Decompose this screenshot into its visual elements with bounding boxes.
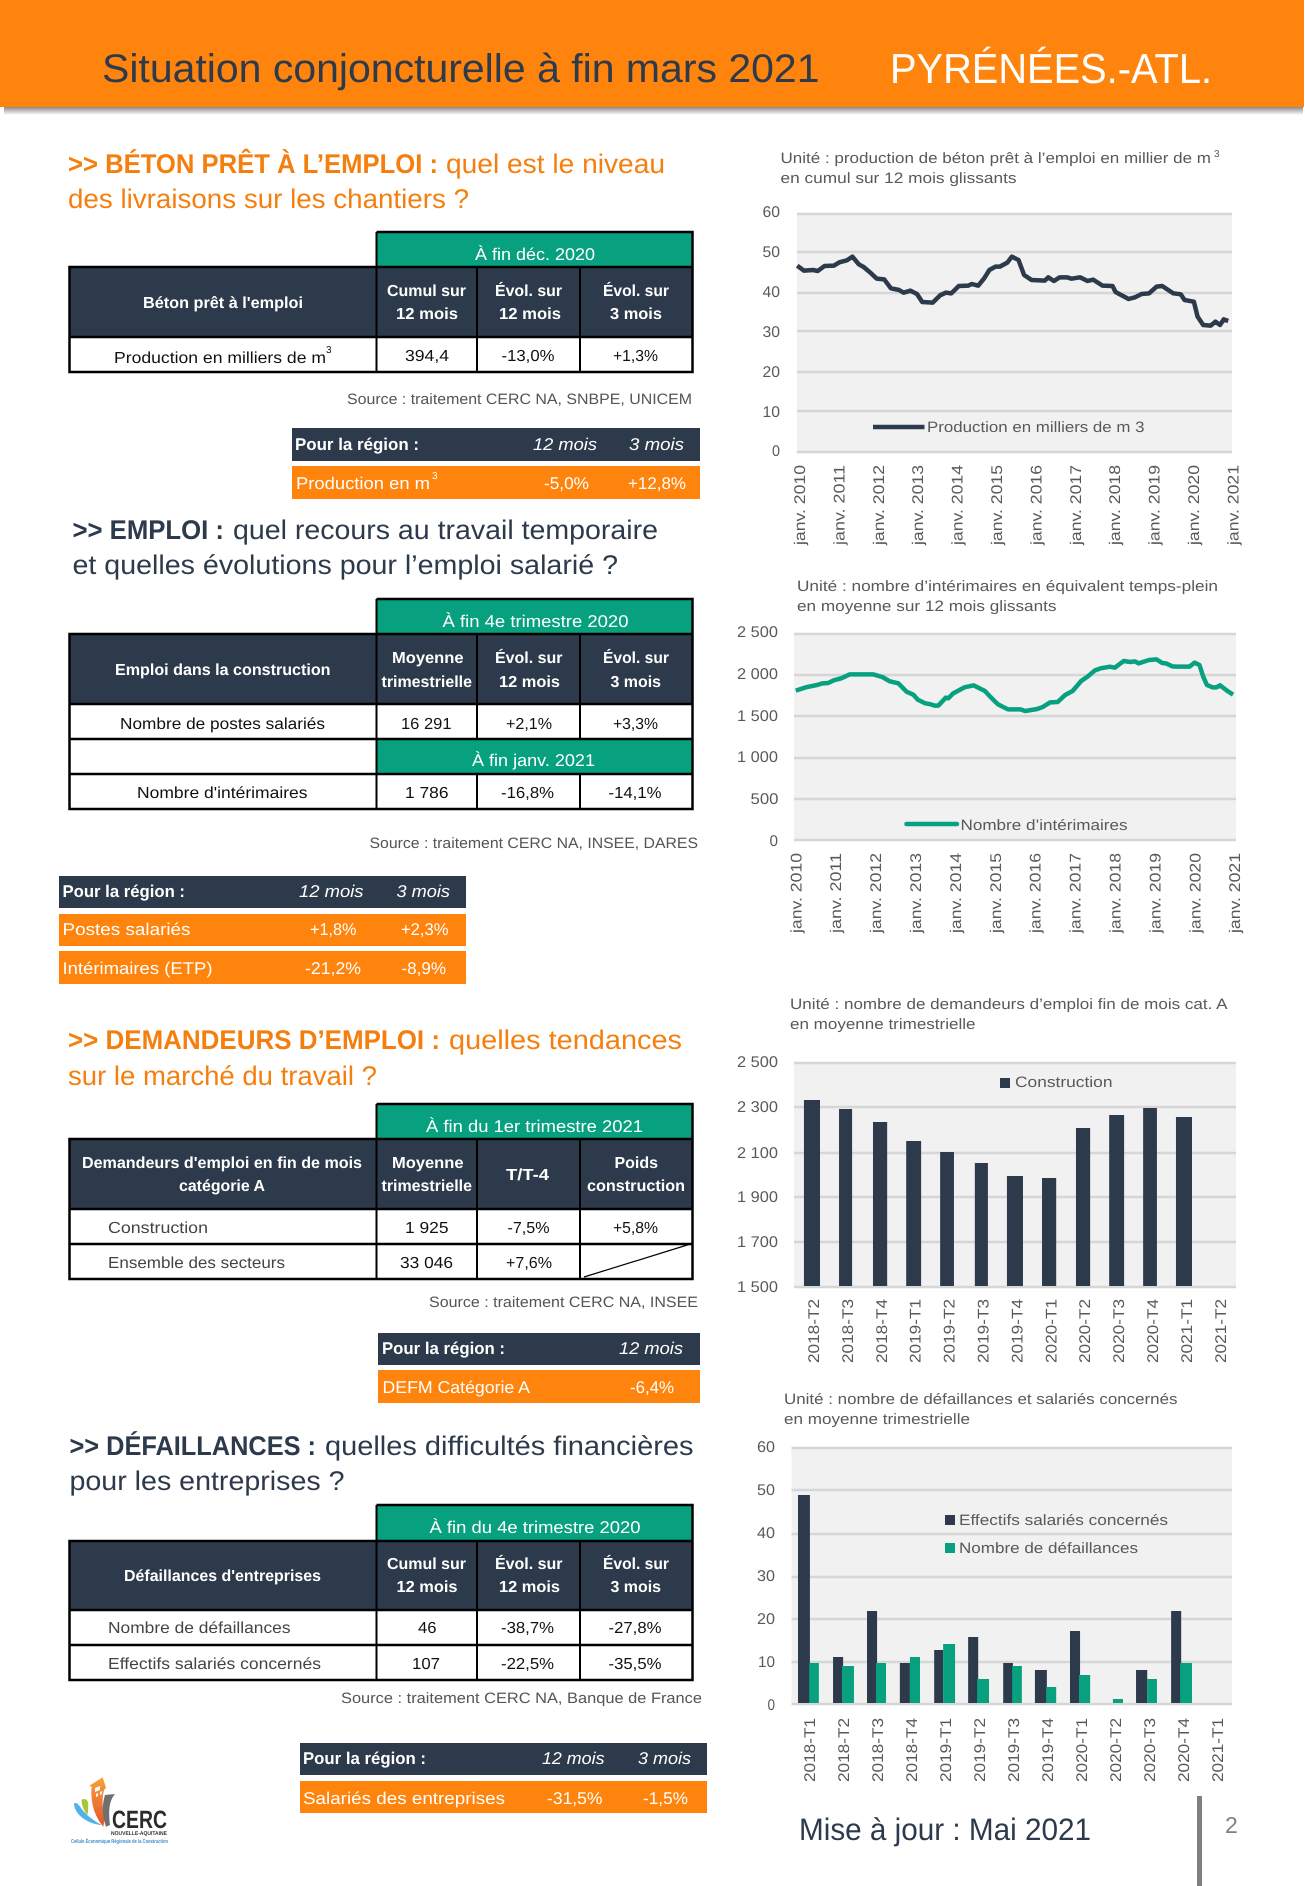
heading: défaillances [70, 1431, 694, 1496]
table: défaillances: 107 [412, 1656, 440, 1673]
y axis: béton: 0 [772, 443, 780, 460]
y axis: béton: 50 [762, 244, 780, 261]
x axis: béton: janv. 2010 [792, 465, 809, 546]
line series: intérimaires [796, 659, 1233, 711]
chart caption: béton: en cumul sur 12 mois glissants [780, 170, 1016, 187]
table: emploi: 16 291 [401, 716, 452, 733]
table: demandeurs d'emploi: T/T-4 [506, 1167, 549, 1184]
table: demandeurs d'emploi: +7,6% [506, 1255, 552, 1272]
chart caption: défaillances: en moyenne trimestrielle [784, 1411, 970, 1428]
chart caption: défaillances: Unité : nombre de défaillances et salariés concernés [784, 1391, 1178, 1408]
table: demandeurs d'emploi: À fin du 1er trimestre 2021 [426, 1117, 643, 1136]
heading: demandeurs d'emploi: sur le marché du travail ? [68, 1061, 377, 1091]
table: emploi: Évol. sur [603, 648, 669, 667]
y axis: demandeurs d'emploi: 1 500 [737, 1279, 778, 1296]
heading: emploi: et quelles évolutions pour l’emploi salarié ? [72, 550, 618, 580]
table: défaillances: 46 [418, 1620, 437, 1637]
table: emploi: Emploi dans la construction [115, 662, 330, 679]
region box: défaillances: Salariés des entreprises [303, 1789, 505, 1808]
table: béton: +1,3% [613, 348, 658, 365]
table: béton: 3 [326, 345, 332, 356]
x axis: défaillances: 2019-T1 [938, 1718, 955, 1782]
table: défaillances: -22,5% [501, 1656, 554, 1673]
x axis: intérimaires: janv. 2014 [948, 853, 965, 934]
y axis: défaillances: 50 [757, 1482, 775, 1499]
y axis: intérimaires: 500 [750, 791, 779, 808]
x axis: demandeurs d'emploi: 2019-T2 [942, 1299, 959, 1363]
table: défaillances: 12 mois [499, 1579, 560, 1596]
table: emploi: +3,3% [613, 716, 658, 733]
y axis: défaillances: 0 [768, 1697, 775, 1714]
x axis: demandeurs d'emploi: 2018-T4 [874, 1299, 891, 1363]
chart caption: intérimaires: Unité : nombre d’intérimaires en équivalent temps-plein [797, 578, 1218, 595]
x axis: défaillances: 2020-T4 [1176, 1718, 1193, 1782]
bar series: construction [804, 1100, 1192, 1286]
table: emploi: 12 mois [499, 674, 560, 691]
x axis: intérimaires: janv. 2018 [1108, 853, 1124, 934]
x axis: demandeurs d'emploi: 2018-T2 [806, 1299, 823, 1363]
table: emploi: 1 786 [405, 785, 449, 802]
region box: béton: 12 mois [533, 435, 598, 454]
x axis: demandeurs d'emploi: 2020-T1 [1043, 1299, 1060, 1363]
x axis: demandeurs d'emploi: 2020-T2 [1077, 1299, 1094, 1363]
line series: production béton [797, 257, 1228, 326]
legend: intérimaires: Nombre d’intérimaires [960, 817, 1128, 834]
heading: demandeurs d'emploi: quelles tendances [449, 1025, 682, 1055]
x axis: demandeurs d'emploi: 2018-T3 [840, 1299, 857, 1363]
table: demandeurs d'emploi: catégorie A [179, 1178, 265, 1195]
table: défaillances: Évol. sur [603, 1554, 669, 1573]
chart caption: demandeurs d'emploi: en moyenne trimestrielle [790, 1016, 976, 1033]
x axis: défaillances: 2019-T4 [1040, 1718, 1057, 1782]
region box: demandeurs d'emploi [378, 1333, 700, 1403]
bar series: effectifs salariés concernés [798, 1495, 1181, 1703]
region box: demandeurs d'emploi: 12 mois [619, 1339, 684, 1358]
region box: emploi: Intérimaires (ETP) [62, 959, 212, 978]
table: demandeurs d'emploi: 1 925 [405, 1220, 449, 1237]
region box: béton: +12,8% [628, 474, 686, 493]
legend: défaillances [945, 1512, 1168, 1557]
table: emploi: À fin janv. 2021 [472, 751, 595, 770]
table: défaillances: -27,8% [608, 1620, 662, 1637]
table: béton: Production en milliers de m [114, 350, 326, 367]
table: défaillances: 3 mois [610, 1579, 661, 1596]
x axis: béton: janv. 2015 [989, 465, 1006, 546]
x axis: intérimaires: janv. 2012 [868, 853, 885, 934]
x axis: béton [792, 465, 1242, 546]
heading: béton: >> BÉTON PRÊT À L’EMPLOI : [68, 148, 438, 179]
x axis: demandeurs d'emploi: 2020-T3 [1111, 1299, 1128, 1363]
y axis: béton: 30 [762, 324, 780, 341]
chart caption: demandeurs d'emploi: Unité : nombre de demandeurs d’emploi fin de mois cat. A [790, 996, 1228, 1013]
bar series: nombre de défaillances [809, 1644, 1192, 1703]
region box: défaillances: 3 mois [638, 1749, 692, 1768]
table: demandeurs d'emploi [70, 1104, 692, 1279]
region box: défaillances: -31,5% [547, 1789, 602, 1808]
logo: CERC Nouvelle-Aquitaine: CERC [112, 1806, 167, 1834]
x axis: demandeurs d'emploi: 2019-T1 [908, 1299, 925, 1363]
header banner [0, 0, 1304, 115]
legend: construction: Construction [1015, 1074, 1112, 1091]
table: emploi: Nombre d'intérimaires [137, 785, 308, 802]
region box: béton: 3 [432, 471, 438, 482]
region box: emploi: +2,3% [401, 920, 448, 939]
region box: emploi: Pour la région : [62, 882, 185, 901]
table: demandeurs d'emploi: Construction [108, 1220, 208, 1237]
table: emploi: Évol. sur [495, 648, 562, 667]
x axis: demandeurs d'emploi: 2019-T3 [976, 1299, 992, 1363]
x axis: défaillances: 2020-T1 [1074, 1718, 1091, 1782]
footer: mise à jour: Mise à jour : Mai 2021 [799, 1812, 1091, 1847]
table: défaillances: Cumul sur [387, 1556, 466, 1573]
chart caption: béton: 3 [1214, 149, 1220, 160]
logo: CERC Nouvelle-Aquitaine [71, 1777, 168, 1845]
footer: page number: 2 [1225, 1812, 1238, 1838]
table: défaillances: À fin du 4e trimestre 2020 [430, 1518, 640, 1537]
y axis: défaillances: 40 [757, 1525, 775, 1542]
x axis: intérimaires: janv. 2013 [908, 853, 925, 934]
chart: production de béton [762, 149, 1242, 546]
x axis: défaillances: 2019-T2 [972, 1718, 989, 1782]
y axis: intérimaires [737, 624, 779, 850]
region box: emploi: +1,8% [310, 920, 356, 939]
x axis: béton: janv. 2018 [1107, 465, 1124, 546]
y axis: intérimaires: 2 000 [737, 666, 778, 683]
table: défaillances: 12 mois [396, 1579, 458, 1596]
y axis: béton: 20 [762, 364, 780, 381]
x axis: intérimaires: janv. 2011 [828, 853, 845, 934]
table: demandeurs d'emploi: Ensemble des secteurs [108, 1255, 285, 1272]
chart caption: béton [780, 149, 1220, 187]
heading: demandeurs d'emploi: >> DEMANDEURS D’EMPLOI : [68, 1025, 440, 1055]
x axis: intérimaires: janv. 2015 [988, 853, 1005, 934]
x axis: défaillances: 2018-T4 [904, 1718, 921, 1782]
footer: vertical divider [1197, 1796, 1202, 1886]
table: béton: À fin déc. 2020 [475, 245, 595, 264]
legend: défaillances: Nombre de défaillances [959, 1540, 1138, 1557]
table: défaillances: Nombre de défaillances [108, 1620, 290, 1637]
table: emploi: Moyenne [392, 650, 464, 667]
y axis: demandeurs d'emploi: 2 300 [737, 1099, 778, 1116]
chart: défaillances [757, 1391, 1232, 1782]
table: défaillances [70, 1505, 692, 1680]
y axis: intérimaires: 1 000 [737, 749, 778, 766]
x axis: béton: janv. 2012 [871, 465, 888, 546]
heading: défaillances: pour les entreprises ? [70, 1466, 344, 1496]
y axis: défaillances: 20 [757, 1611, 775, 1628]
source: béton: Source : traitement CERC NA, SNBPE, UNICEM [347, 391, 692, 408]
y axis: demandeurs d'emploi: 2 100 [737, 1145, 778, 1162]
region box: béton [292, 428, 700, 499]
region box: béton: Pour la région : [295, 435, 419, 454]
legend: défaillances: Effectifs salariés concernés [959, 1512, 1168, 1529]
chart: demandeurs d'emploi [737, 996, 1236, 1363]
y axis: béton [762, 204, 780, 460]
x axis: intérimaires: janv. 2020 [1187, 853, 1204, 934]
heading: emploi: quel recours au travail temporaire [233, 515, 658, 545]
region box: demandeurs d'emploi: DEFM Catégorie A [382, 1378, 531, 1397]
table: emploi: 3 mois [610, 674, 661, 691]
x axis: défaillances [802, 1718, 1227, 1782]
y axis: défaillances: 10 [758, 1654, 775, 1671]
x axis: béton: janv. 2020 [1186, 465, 1203, 546]
panel: béton prêt à l'emploi [68, 148, 700, 499]
y axis: béton: 40 [762, 284, 780, 301]
x axis: béton: janv. 2011 [831, 465, 848, 546]
y axis: demandeurs d'emploi [737, 1054, 778, 1296]
y axis: intérimaires: 1 500 [737, 708, 778, 725]
y axis: demandeurs d'emploi: 2 500 [737, 1054, 778, 1071]
logo: CERC Nouvelle-Aquitaine: NOUVELLE-AQUITAINE [111, 1831, 167, 1837]
table: défaillances: -35,5% [608, 1656, 662, 1673]
x axis: demandeurs d'emploi: 2019-T4 [1009, 1299, 1026, 1363]
region box: béton: 3 mois [629, 435, 685, 454]
x axis: intérimaires: janv. 2021 [1227, 853, 1244, 934]
table: emploi [70, 599, 692, 809]
x axis: demandeurs d'emploi: 2021-T1 [1179, 1299, 1196, 1363]
chart caption: défaillances [784, 1391, 1178, 1428]
table: demandeurs d'emploi: construction [587, 1178, 685, 1195]
chart: intérimaires [737, 578, 1244, 934]
y axis: défaillances: 30 [757, 1568, 775, 1585]
region box: béton: Production en m [296, 474, 430, 493]
panel: emploi [59, 515, 698, 984]
region box: emploi: -8,9% [402, 959, 446, 978]
x axis: intérimaires: janv. 2017 [1068, 853, 1085, 934]
x axis: demandeurs d'emploi: 2021-T2 [1213, 1299, 1230, 1363]
region box: demandeurs d'emploi: Pour la région : [382, 1339, 505, 1358]
region box: défaillances: 12 mois [542, 1749, 605, 1768]
heading: emploi [72, 515, 658, 580]
source: défaillances: Source : traitement CERC NA, Banque de France [341, 1690, 702, 1707]
table: demandeurs d'emploi: Demandeurs d'emploi en fin de mois [82, 1155, 362, 1172]
y axis: béton: 10 [762, 404, 780, 421]
table: emploi: +2,1% [506, 716, 552, 733]
table: béton: Cumul sur [387, 283, 466, 300]
region box: demandeurs d'emploi: -6,4% [630, 1378, 674, 1397]
x axis: intérimaires: janv. 2016 [1028, 853, 1045, 934]
region box: béton: -5,0% [544, 474, 589, 493]
x axis: béton: janv. 2017 [1068, 465, 1085, 546]
title: Situation conjoncturelle à fin mars 2021 [102, 47, 820, 91]
table: emploi: Nombre de postes salariés [120, 716, 325, 733]
heading: béton: des livraisons sur les chantiers ? [68, 184, 469, 214]
x axis: intérimaires: janv. 2010 [788, 853, 805, 934]
x axis: défaillances: 2018-T3 [870, 1718, 887, 1782]
region box: défaillances [300, 1743, 707, 1813]
table: béton: Évol. sur [495, 281, 562, 300]
chart caption: demandeurs d'emploi [790, 996, 1228, 1033]
x axis: béton: janv. 2016 [1028, 465, 1045, 546]
table: béton: 12 mois [499, 306, 561, 323]
table: demandeurs d'emploi: Poids [614, 1155, 658, 1172]
x axis: défaillances: 2021-T1 [1210, 1718, 1227, 1782]
x axis: défaillances: 2018-T1 [802, 1718, 819, 1782]
panel: demandeurs d'emploi [68, 1025, 700, 1403]
heading: défaillances: >> DÉFAILLANCES : [70, 1431, 316, 1461]
region box: emploi: 12 mois [299, 882, 364, 901]
x axis: défaillances: 2018-T2 [836, 1718, 853, 1782]
table: béton: 3 mois [610, 306, 662, 323]
chart caption: intérimaires: en moyenne sur 12 mois glissants [797, 598, 1056, 615]
y axis: intérimaires: 2 500 [737, 624, 778, 641]
legend: production béton: Production en milliers de m 3 [927, 419, 1144, 436]
x axis: béton: janv. 2014 [950, 465, 967, 546]
y axis: demandeurs d'emploi: 1 900 [737, 1189, 778, 1206]
source: demandeurs d'emploi: Source : traitement CERC NA, INSEE [429, 1294, 698, 1311]
x axis: demandeurs d'emploi: 2020-T4 [1145, 1299, 1162, 1363]
x axis: béton: janv. 2013 [910, 465, 927, 546]
table: défaillances: Évol. sur [495, 1554, 562, 1573]
table: demandeurs d'emploi: 33 046 [400, 1255, 453, 1272]
region box: emploi: Postes salariés [62, 920, 190, 939]
chart caption: béton: Unité : production de béton prêt à l’emploi en millier de m [780, 150, 1211, 167]
table: défaillances: -38,7% [501, 1620, 554, 1637]
y axis: béton: 60 [762, 204, 780, 221]
table: demandeurs d'emploi: -7,5% [508, 1220, 550, 1237]
table: demandeurs d'emploi: trimestrielle [382, 1178, 472, 1195]
x axis: béton: janv. 2021 [1225, 465, 1242, 546]
chart caption: intérimaires [797, 578, 1218, 615]
department name: PYRÉNÉES.-ATL. [890, 45, 1212, 92]
y axis: défaillances [757, 1439, 775, 1714]
table: défaillances: Effectifs salariés concernés [108, 1656, 321, 1673]
source: emploi: Source : traitement CERC NA, INSEE, DARES [370, 835, 698, 852]
table: emploi: -16,8% [501, 785, 554, 802]
table: béton: Béton prêt à l'emploi [143, 295, 303, 312]
x axis: béton: janv. 2019 [1147, 465, 1164, 546]
table: demandeurs d'emploi: +5,8% [613, 1220, 658, 1237]
table: béton: Évol. sur [603, 281, 669, 300]
logo: CERC Nouvelle-Aquitaine: Cellule Économique Régionale de la Construction [71, 1838, 168, 1845]
table: défaillances: Défaillances d'entreprises [124, 1568, 321, 1585]
y axis: demandeurs d'emploi: 1 700 [737, 1234, 778, 1251]
table: béton: 394,4 [405, 348, 449, 365]
panel: défaillances [70, 1431, 707, 1813]
x axis: intérimaires [788, 853, 1244, 934]
table: béton: 12 mois [396, 306, 458, 323]
y axis: intérimaires: 0 [770, 833, 778, 850]
table: béton [70, 232, 692, 372]
heading: béton [68, 148, 665, 214]
region box: emploi: 3 mois [396, 882, 451, 901]
x axis: défaillances: 2020-T2 [1108, 1718, 1125, 1782]
table: demandeurs d'emploi: Moyenne [392, 1155, 464, 1172]
y axis: défaillances: 60 [757, 1439, 775, 1456]
heading: défaillances: quelles difficultés financières [325, 1431, 694, 1461]
heading: demandeurs d'emploi [68, 1025, 682, 1091]
region box: défaillances: -1,5% [643, 1789, 688, 1808]
region box: emploi [59, 876, 466, 984]
table: emploi: trimestrielle [382, 674, 472, 691]
table: emploi: -14,1% [608, 785, 662, 802]
table: emploi: À fin 4e trimestre 2020 [442, 612, 628, 631]
region box: emploi: -21,2% [305, 959, 361, 978]
x axis: demandeurs d'emploi [806, 1299, 1230, 1363]
table: béton: -13,0% [502, 348, 554, 365]
x axis: intérimaires: janv. 2019 [1147, 853, 1164, 934]
heading: emploi: >> EMPLOI : [72, 515, 224, 545]
region box: défaillances: Pour la région : [303, 1749, 426, 1768]
x axis: défaillances: 2020-T3 [1142, 1718, 1159, 1782]
heading: béton: quel est le niveau [446, 149, 665, 179]
x axis: défaillances: 2019-T3 [1006, 1718, 1023, 1782]
